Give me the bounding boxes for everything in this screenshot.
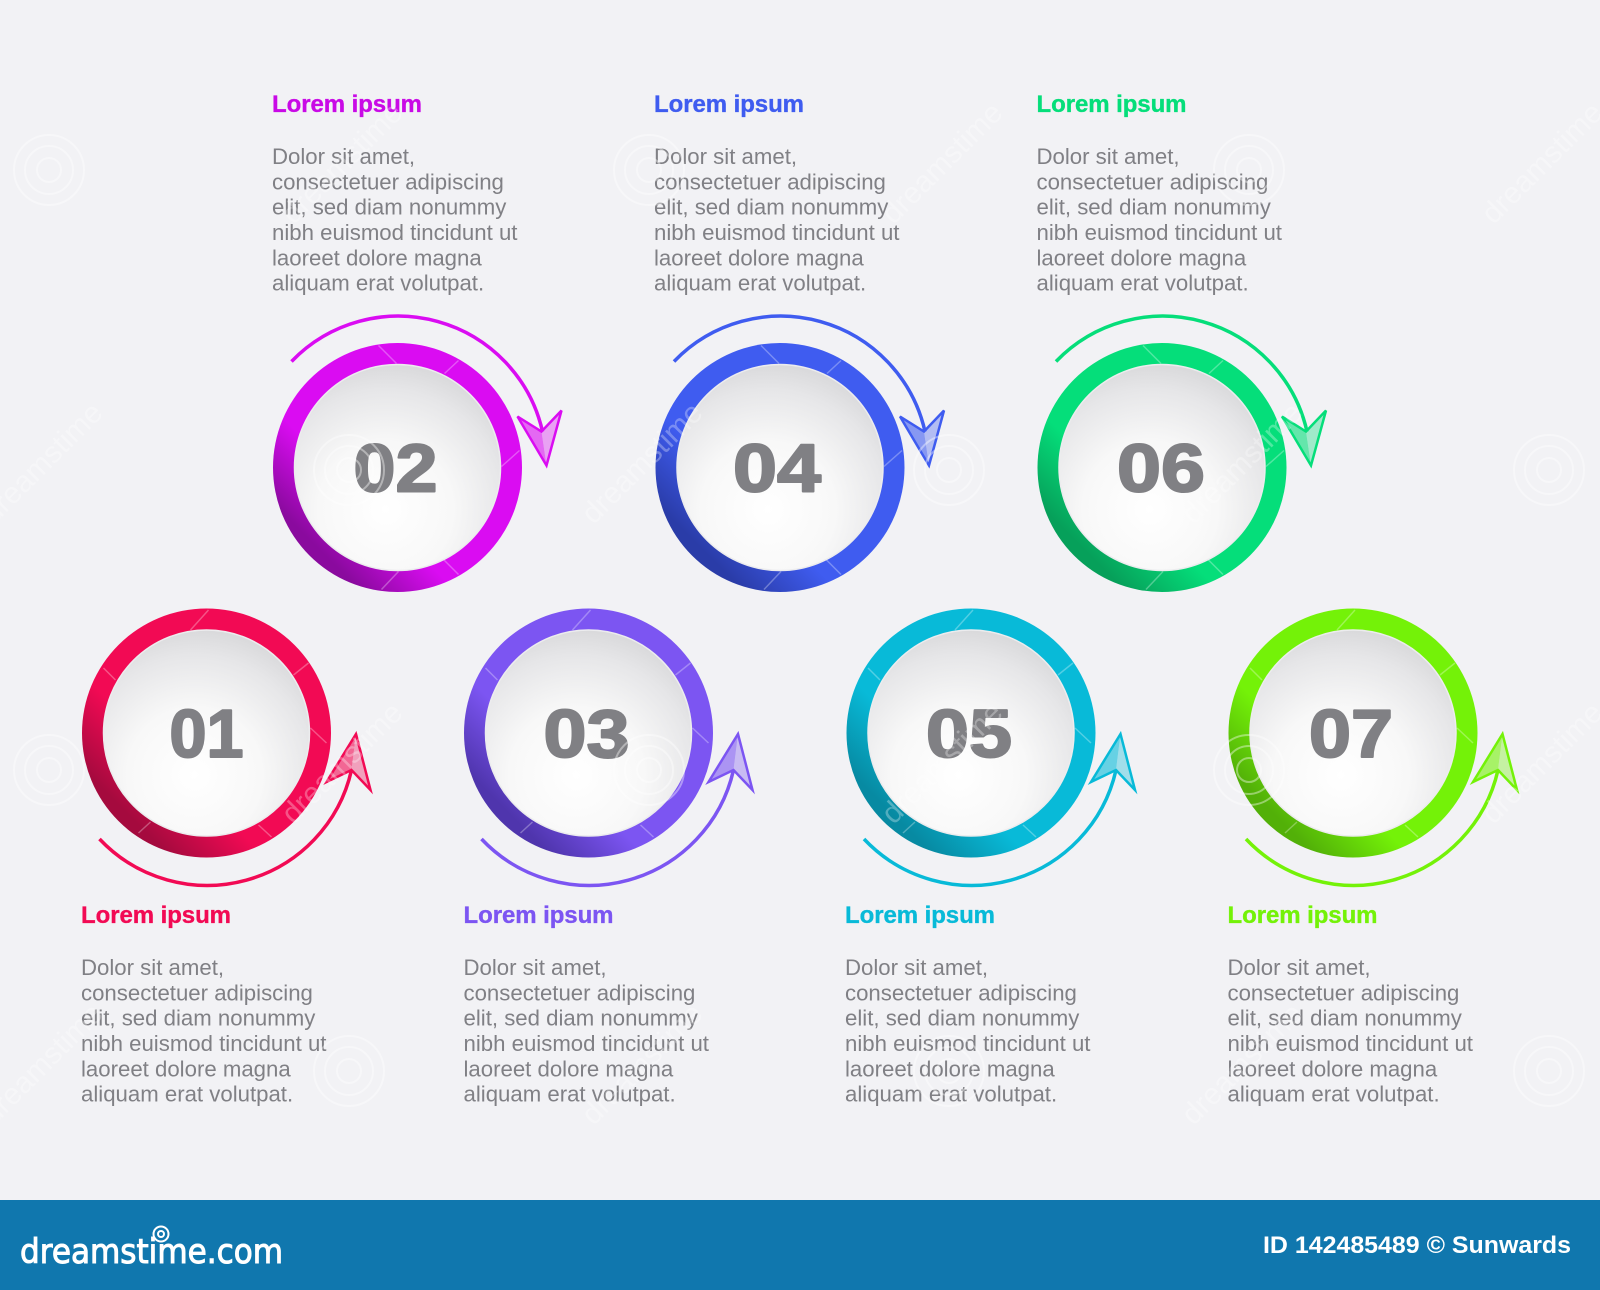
body 04: elit, sed diam nonummy [654, 194, 889, 220]
number 03: 03 [544, 696, 630, 772]
body 03: laoreet dolore magna [464, 1056, 674, 1082]
watermark text: dreamstime [575, 997, 709, 1131]
body 03 [464, 955, 709, 1106]
body 02: laoreet dolore magna [272, 246, 482, 270]
watermark text: dreamstime [875, 696, 1009, 830]
step 03 heading and text [464, 902, 709, 1106]
heading 07: Lorem ipsum [1228, 902, 1378, 929]
arrow 01 [100, 734, 370, 885]
body 02: Dolor sit amet, [272, 144, 415, 169]
heading 03: Lorem ipsum [464, 902, 614, 929]
ring 04 [656, 343, 904, 592]
number 04: 04 [733, 430, 821, 506]
circle 02 with arrow [273, 316, 562, 592]
disc 05 [868, 630, 1074, 836]
body 05: nibh euismod tincidunt ut [845, 1031, 1090, 1056]
ring 02 [273, 343, 522, 592]
body 04 [654, 144, 899, 296]
body 04: aliquam erat volutpat. [654, 270, 866, 296]
circle 05 with arrow [846, 608, 1135, 885]
disc 02 [294, 364, 500, 570]
arrow 03 [482, 734, 752, 885]
circle 03 with arrow [464, 608, 752, 885]
watermark text: dreamstime [875, 96, 1009, 230]
body 07: consectetuer adipiscing [1228, 980, 1459, 1006]
footer logo spiral [154, 1226, 168, 1242]
body 05: Dolor sit amet, [845, 955, 988, 980]
body 04: Dolor sit amet, [654, 144, 797, 169]
body 03: Dolor sit amet, [464, 955, 607, 980]
body 01: consectetuer adipiscing [81, 980, 313, 1006]
disc 04 [677, 364, 883, 570]
footer credit: ID 142485489 © Sunwards [1263, 1232, 1571, 1259]
body 03: aliquam erat volutpat. [464, 1082, 676, 1106]
number 07: 07 [1309, 696, 1393, 772]
body 03: elit, sed diam nonummy [464, 1006, 699, 1030]
footer bar [0, 1200, 1600, 1290]
body 05 [845, 955, 1090, 1106]
body 07: Dolor sit amet, [1228, 955, 1371, 980]
body 01: Dolor sit amet, [81, 955, 224, 980]
body 05: elit, sed diam nonummy [845, 1006, 1080, 1030]
heading 06: Lorem ipsum [1036, 91, 1186, 118]
number 06: 06 [1117, 430, 1205, 506]
body 06: aliquam erat volutpat. [1036, 270, 1249, 296]
ring 01 [82, 608, 331, 858]
arrow 06 [1056, 316, 1326, 466]
number 02: 02 [354, 430, 438, 506]
watermark text: dreamstime [1175, 997, 1309, 1131]
arrow 05 [864, 734, 1135, 885]
body 01: laoreet dolore magna [81, 1056, 291, 1082]
circle 07 with arrow [1228, 608, 1517, 885]
arrow 04 [674, 316, 944, 466]
ring 05 [846, 608, 1096, 858]
body 06: laoreet dolore magna [1036, 246, 1247, 270]
watermark overlay [14, 135, 1584, 1106]
body 06 [1036, 144, 1282, 296]
watermark text: dreamstime [575, 396, 709, 530]
body 03: consectetuer adipiscing [464, 980, 695, 1006]
circle 01 with arrow [82, 608, 370, 885]
disc 06 [1059, 364, 1265, 570]
disc 07 [1250, 630, 1456, 836]
step 06 heading and text [1036, 91, 1282, 296]
circle 06 with arrow [1038, 316, 1326, 592]
heading 01: Lorem ipsum [81, 902, 231, 929]
step 07 heading and text [1228, 902, 1473, 1106]
ring 03 [464, 608, 713, 858]
step 04 heading and text [654, 91, 899, 296]
body 01: elit, sed diam nonummy [81, 1006, 316, 1030]
body 02: aliquam erat volutpat. [272, 270, 484, 296]
body 05: laoreet dolore magna [845, 1056, 1055, 1082]
heading 05: Lorem ipsum [845, 902, 995, 929]
body 06: consectetuer adipiscing [1036, 170, 1268, 194]
body 07: laoreet dolore magna [1228, 1056, 1438, 1082]
heading 02: Lorem ipsum [272, 91, 422, 118]
body 07 [1228, 955, 1473, 1106]
number 05: 05 [926, 696, 1012, 772]
body 01 [81, 955, 326, 1106]
watermark text: dreamstime [275, 696, 409, 830]
body 06: elit, sed diam nonummy [1036, 194, 1272, 220]
body 02 [272, 144, 517, 296]
body 04: nibh euismod tincidunt ut [654, 220, 899, 245]
body 07: aliquam erat volutpat. [1228, 1082, 1440, 1106]
ring 06 [1038, 343, 1286, 592]
circle 04 with arrow [656, 316, 944, 592]
body 06: nibh euismod tincidunt ut [1036, 220, 1282, 245]
body 02: consectetuer adipiscing [272, 170, 504, 194]
arrow 07 [1246, 734, 1517, 885]
body 02: nibh euismod tincidunt ut [272, 220, 517, 245]
body 03: nibh euismod tincidunt ut [464, 1031, 709, 1056]
body 01: aliquam erat volutpat. [81, 1082, 293, 1106]
body 07: elit, sed diam nonummy [1228, 1006, 1463, 1030]
body 05: consectetuer adipiscing [845, 980, 1077, 1006]
heading 04: Lorem ipsum [654, 91, 804, 118]
ring 07 [1228, 608, 1478, 858]
body 01: nibh euismod tincidunt ut [81, 1031, 326, 1056]
number 01: 01 [170, 696, 244, 772]
footer logo text: dreamstime.com [20, 1232, 283, 1272]
body 05: aliquam erat volutpat. [845, 1082, 1057, 1106]
body 02: elit, sed diam nonummy [272, 194, 507, 220]
disc 03 [486, 630, 692, 836]
watermark text: dreamstime [1175, 396, 1309, 530]
body 06: Dolor sit amet, [1036, 144, 1180, 169]
watermark text: dreamstime [275, 96, 409, 230]
disc 01 [104, 630, 310, 836]
body 04: laoreet dolore magna [654, 246, 864, 270]
step 01 heading and text [81, 902, 326, 1106]
step 05 heading and text [845, 902, 1090, 1106]
body 04: consectetuer adipiscing [654, 170, 886, 194]
body 07: nibh euismod tincidunt ut [1228, 1031, 1473, 1056]
step 02 heading and text [272, 91, 517, 296]
arrow 02 [292, 316, 562, 466]
